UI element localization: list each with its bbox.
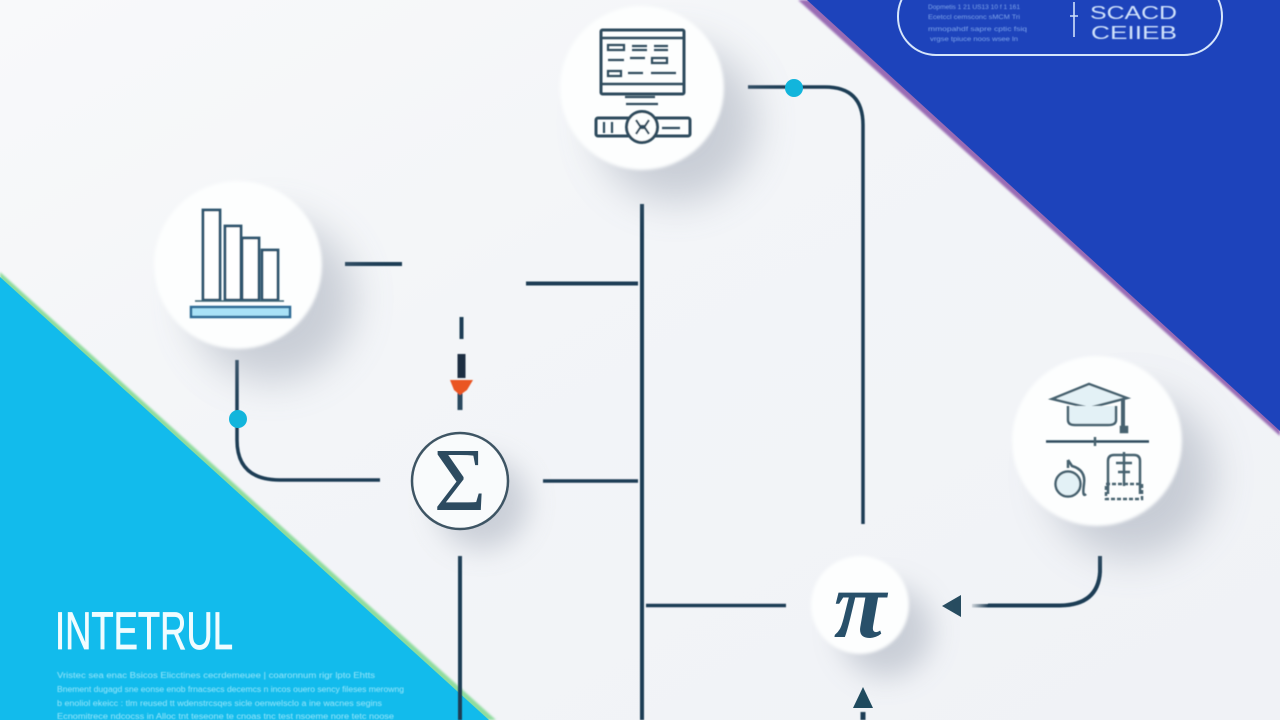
connectors	[237, 87, 1100, 720]
arrow: down into sigma	[450, 317, 473, 410]
connector node: top	[785, 79, 803, 97]
node: monitor	[560, 6, 756, 202]
pill label: CEIIEB	[1091, 23, 1177, 43]
node: sigma	[412, 431, 528, 549]
arrow: into pi from below	[853, 687, 873, 708]
description text	[57, 671, 404, 720]
pill description text: vrgse tpiuce noos wsee ln	[930, 36, 1018, 43]
panel: blue corner	[798, 0, 1280, 436]
pill description text: mmopahdf sapre cptic fsiq	[928, 26, 1027, 33]
title: INTETRUL	[55, 602, 233, 661]
pill description text: Dopmetis 1 21 US13 10 f 1 161	[928, 4, 1020, 11]
callout pill	[898, 0, 1222, 55]
connector node: left	[229, 410, 247, 428]
node: graduation	[1012, 356, 1214, 558]
pill description text	[928, 4, 1027, 43]
icon: pi: π	[834, 551, 889, 658]
icon: bar chart	[191, 210, 290, 317]
pill divider	[1070, 2, 1078, 37]
node: bar chart	[154, 181, 354, 381]
icon: monitor	[596, 30, 690, 142]
description text: b enoliol ekeicc : tlm reused tt wdenstrcsqes sicle oenwelsclo a ine wacnes segins	[57, 699, 382, 708]
pill label	[1090, 3, 1177, 43]
pill description text: Ecetccl cemsconc sMCM Tri	[928, 14, 1020, 21]
pill label: SCACD	[1090, 3, 1177, 23]
icon: sigma: Σ	[434, 431, 486, 530]
description text: Bnement dugagd sne eonse enob frnacsecs decemcs n incos ouero sency fileses merowng	[57, 685, 404, 694]
panel: cyan corner	[0, 272, 496, 720]
description text: Vristec sea enac Bsicos Elicctines cecrdemeuee | coaronnum rigr lpto Ehtts	[57, 671, 375, 680]
arrow: into pi from right	[942, 595, 961, 617]
node: pi	[811, 551, 932, 677]
icon: graduation cap and symbols	[1046, 384, 1149, 499]
